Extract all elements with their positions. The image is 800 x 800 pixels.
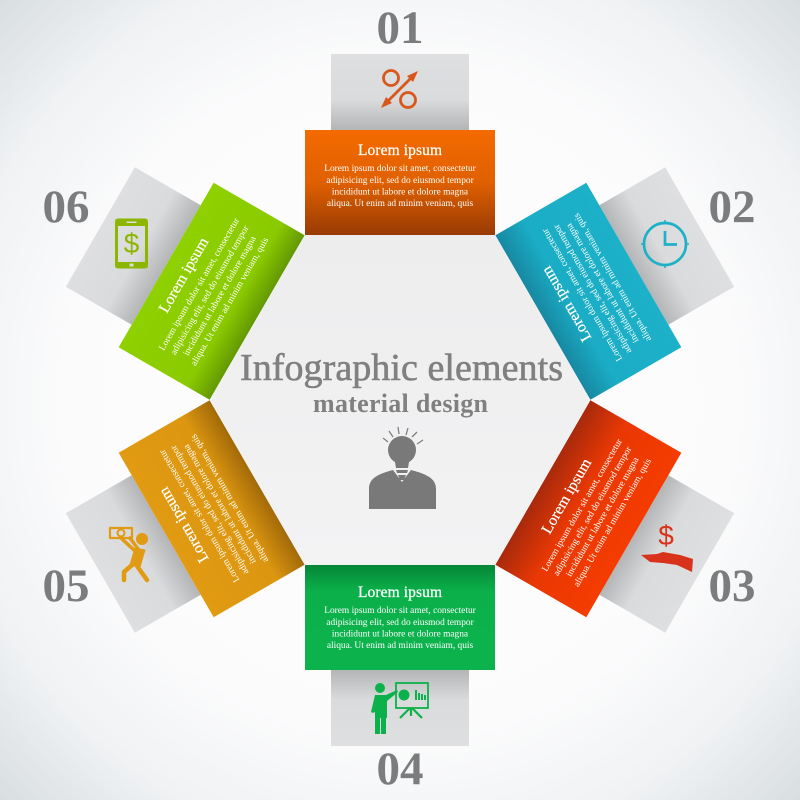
grey icon card 02 (599, 167, 734, 325)
subtitle: material design (313, 389, 489, 418)
body text 06: incididunt ut labore et dolore magna (182, 234, 259, 358)
icon: smartphone with dollar: $ (124, 228, 140, 259)
icon: person lifting banknote (110, 528, 148, 580)
orange text box 01 (305, 130, 495, 235)
body text 05: aliqua. Ut enim ad minim veniam, quis (189, 432, 271, 564)
grey icon card 06 (66, 167, 201, 325)
body text 02: Lorem ipsum dolor sit amet, consectetur (540, 226, 625, 363)
body text 03: Lorem ipsum dolor sit amet, consectetur (541, 437, 625, 574)
body text 03: adipisicing elit, sed do eiusmod tempor (552, 444, 635, 578)
panel: 04 presentation (305, 565, 495, 795)
number 01: 01 (376, 2, 424, 54)
body text 04: Lorem ipsum dolor sit amet, consectetur (324, 606, 477, 616)
heading 05: Lorem ipsum (156, 484, 212, 565)
body text 05: adipisicing elit, sed do eiusmod tempor (169, 442, 252, 576)
body text 01: aliqua. Ut enim ad minim veniam, quis (327, 199, 474, 209)
icon: hand with dollar: $ (658, 520, 674, 551)
icon: percent with arrows (381, 70, 418, 108)
heading 06: Lorem ipsum (156, 235, 212, 316)
central hexagon (210, 235, 590, 565)
heading 01: Lorem ipsum (358, 142, 442, 159)
body text 02: incididunt ut labore et dolore magna (564, 221, 641, 344)
icon: smartphone with dollar (116, 219, 148, 268)
number 05: 05 (42, 560, 90, 612)
title: Infographic elements (240, 347, 563, 389)
body text 01: incididunt ut labore et dolore magna (332, 188, 469, 198)
body text 03: aliqua. Ut enim ad minim veniam, quis (572, 457, 654, 589)
body text 02: aliqua. Ut enim ad minim veniam, quis (572, 211, 654, 343)
heading 02: Lorem ipsum (538, 263, 595, 344)
body text 03: incididunt ut labore et dolore magna (565, 455, 642, 579)
body text 06: aliqua. Ut enim ad minim veniam, quis (189, 236, 271, 368)
body text 04: aliqua. Ut enim ad minim veniam, quis (327, 641, 474, 651)
body text 01: Lorem ipsum dolor sit amet, consectetur (324, 164, 477, 174)
icon: clock (641, 220, 689, 268)
red text box 03 (495, 400, 681, 617)
body text 05: Lorem ipsum dolor sit amet, consectetur (157, 447, 242, 584)
grey icon card 05 (66, 475, 201, 633)
body text 01: adipisicing elit, sed do eiusmod tempor (326, 176, 475, 186)
icon: presenter at board (371, 683, 428, 734)
panel: 02 clock (495, 167, 756, 400)
grey icon card 03 (599, 475, 734, 633)
icon: hand with dollar (641, 520, 693, 572)
panel: 06 phone (42, 167, 305, 400)
body text 02: adipisicing elit, sed do eiusmod tempor (552, 221, 634, 355)
panel: 05 person lifting money (42, 400, 305, 633)
body text 06: adipisicing elit, sed do eiusmod tempor (169, 223, 252, 357)
panel: 01 percent (305, 2, 495, 235)
body text 06: Lorem ipsum dolor sit amet, consectetur (158, 216, 243, 353)
number 03: 03 (708, 560, 756, 612)
heading 04: Lorem ipsum (358, 584, 442, 601)
number 06: 06 (42, 181, 90, 233)
heading 03: Lorem ipsum (538, 456, 595, 537)
lime text box 06 (119, 183, 305, 400)
panel: 03 money in hand (495, 400, 756, 633)
body text 04: adipisicing elit, sed do eiusmod tempor (326, 618, 475, 628)
icon: person with light bulb head (369, 427, 436, 509)
body text 05: incididunt ut labore et dolore magna (182, 442, 259, 565)
number 04: 04 (376, 743, 424, 795)
grey icon card 01 (331, 54, 469, 130)
body text 04: incididunt ut labore et dolore magna (332, 630, 469, 640)
number 02: 02 (708, 181, 756, 233)
teal text box 02 (495, 183, 681, 400)
green text box 04 (305, 565, 495, 670)
amber text box 05 (119, 400, 305, 617)
grey icon card 04 (331, 670, 469, 746)
